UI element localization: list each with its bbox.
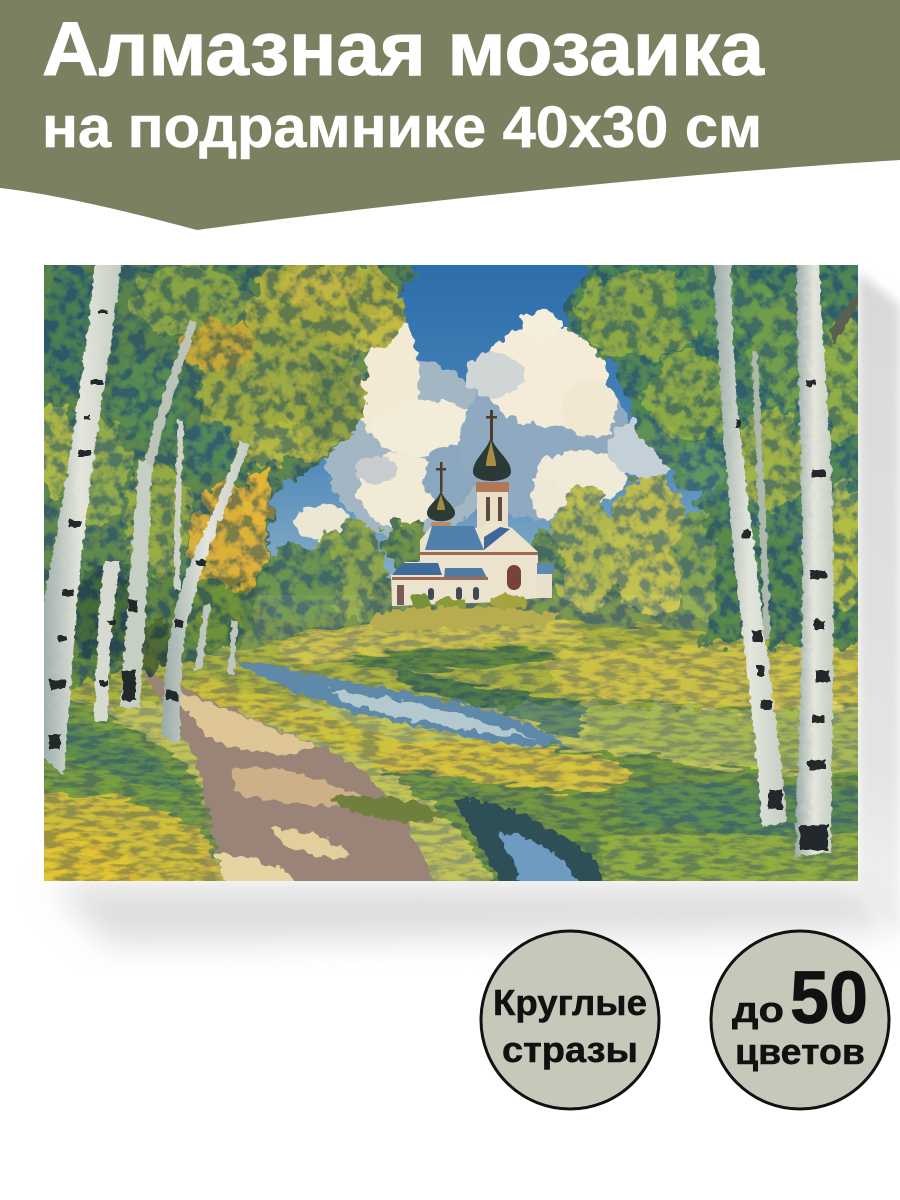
birch bark marks: [48, 310, 830, 850]
meadow: [44, 620, 858, 881]
badge: up to 50 colours: до: [732, 989, 784, 1030]
header banner: [0, 0, 900, 230]
birch trunks: [40, 255, 860, 857]
clouds: [294, 309, 683, 540]
title: Алмазная мозаика: [42, 7, 765, 92]
church main walls: [391, 520, 538, 606]
badge: round rhinestones: [481, 931, 659, 1109]
right tree canopy: [563, 265, 858, 652]
sky: [44, 265, 858, 595]
left tree canopy: [44, 265, 420, 689]
badge: up to 50 colours: [711, 931, 889, 1109]
badge: round rhinestones: Круглые: [493, 982, 647, 1023]
river: [235, 660, 568, 747]
church windows: [507, 565, 521, 590]
church tower and domes: [477, 492, 508, 530]
church: [391, 410, 554, 606]
distant treeline: [0, 477, 900, 705]
right birches: [713, 255, 787, 827]
badge: round rhinestones: стразы: [502, 1029, 638, 1070]
foreground grass left: [44, 700, 226, 881]
badge: up to 50 colours: 50: [790, 956, 868, 1039]
bushes and hill by church: [370, 594, 560, 632]
canvas drop shadow: [50, 272, 900, 945]
left birches: [40, 255, 122, 775]
church roofs: [425, 526, 484, 550]
dirt path: [142, 670, 444, 881]
painting: church landscape: [44, 265, 858, 881]
pond: [454, 796, 602, 881]
foreground grass right: [190, 676, 858, 881]
subtitle: на подрамнике 40х30 см: [42, 95, 762, 160]
badge: up to 50 colours: цветов: [735, 1031, 865, 1072]
